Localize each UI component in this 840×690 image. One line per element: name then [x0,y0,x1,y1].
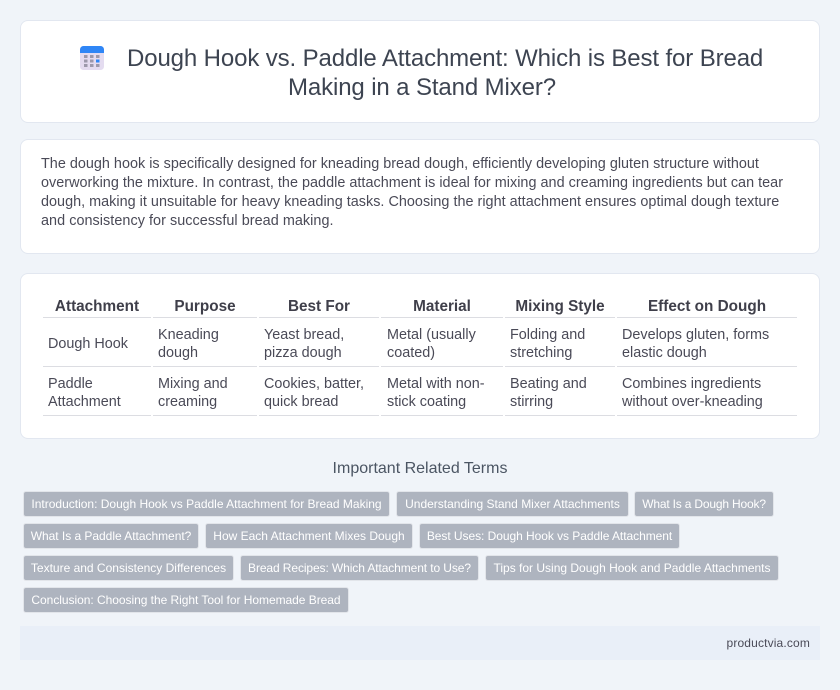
row 1: material [387,327,476,361]
tag [24,588,348,612]
row 2: material: Metal with non- [387,376,485,392]
title panel [20,20,820,123]
footer bar [20,626,820,660]
row 2: material: stick coating [387,394,466,410]
row 1: mixing style: stretching [510,345,572,361]
row 2: best for [264,376,364,410]
row 2: mixing style: Beating and [510,376,587,392]
row 2: purpose: creaming [158,394,217,410]
tag [486,556,778,580]
tag [397,492,628,516]
tag: What Is a Dough Hook? [642,497,766,511]
table header: Effect on Dough: Effect on Dough [648,298,766,315]
row 1: purpose: Kneading [158,327,219,343]
tag [241,556,478,580]
tag [206,524,412,548]
tag [24,492,389,516]
row 2: purpose: Mixing and [158,376,228,392]
heading [127,45,763,101]
tag: Tips for Using Dough Hook and Paddle Attachments [493,561,771,575]
icon: calendar [80,46,104,70]
row 1: effect [622,327,769,361]
row 2: best for: Cookies, batter, [264,376,364,392]
table header: Attachment: Attachment [55,298,139,315]
tag [635,492,773,516]
table header: Mixing Style: Mixing Style [515,298,605,315]
row 1: mixing style: Folding and [510,327,585,343]
tag: Introduction: Dough Hook vs Paddle Attachment for Bread Making [31,497,382,511]
row 2: Paddle Attachment: Paddle [48,376,93,392]
row 1: mixing style [510,327,585,361]
tag: Texture and Consistency Differences [31,561,226,575]
row 2: effect: Combines ingredients [622,376,761,392]
row 1: purpose: dough [158,345,198,361]
row 1: material: coated) [387,345,435,361]
row 1: Dough Hook: Dough Hook [48,336,128,352]
row 2: effect: without over-kneading [622,394,763,410]
tag: Understanding Stand Mixer Attachments [405,497,620,511]
tag: What Is a Paddle Attachment? [31,529,191,543]
tag: Conclusion: Choosing the Right Tool for Homemade Bread [31,593,341,607]
row 1: effect: Develops gluten, forms [622,327,769,343]
table header: Purpose: Purpose [174,298,236,315]
tag: Bread Recipes: Which Attachment to Use? [248,561,471,575]
panel: comparison table [20,273,820,439]
row 2: mixing style [510,376,587,410]
row 1: best for [264,327,344,361]
table header: Best For: Best For [288,298,350,315]
panel: introduction [20,139,820,254]
footer text: productvia.com [727,636,810,650]
related terms heading: Important Related Terms [333,460,507,477]
tag: How Each Attachment Mixes Dough [213,529,405,543]
text block: introduction: overworking the mixture. In contrast, the paddle attachment is ideal for mixing and creaming ingredients but can tear [41,175,783,191]
row 1: effect: elastic dough [622,345,707,361]
text block: introduction: and consistency for successful bread making. [41,213,334,229]
row 1: best for: Yeast bread, [264,327,344,343]
row 2: material [387,376,485,410]
row 1: purpose [158,327,219,361]
text block: introduction: dough, making it unsuitable for heavy kneading tasks. Choosing the right attachment ensures optimal dough texture [41,194,779,210]
row 1: best for: pizza dough [264,345,342,361]
row 2: Paddle Attachment: Attachment [48,394,121,410]
heading: Making in a Stand Mixer? [288,74,556,101]
row 2: best for: quick bread [264,394,338,410]
row 2: Paddle Attachment [48,376,121,410]
text block: introduction [41,156,783,229]
row 2: purpose [158,376,228,410]
row 2: mixing style: stirring [510,394,553,410]
table header: Material: Material [413,298,471,315]
tag [24,556,233,580]
row 2: effect [622,376,763,410]
text block: introduction: The dough hook is specifically designed for kneading bread dough, efficiently developing gluten structure without [41,156,759,172]
tag: Best Uses: Dough Hook vs Paddle Attachment [427,529,672,543]
tag [420,524,679,548]
row 1: material: Metal (usually [387,327,476,343]
tag [24,524,198,548]
heading: Dough Hook vs. Paddle Attachment: Which is Best for Bread [127,45,763,72]
